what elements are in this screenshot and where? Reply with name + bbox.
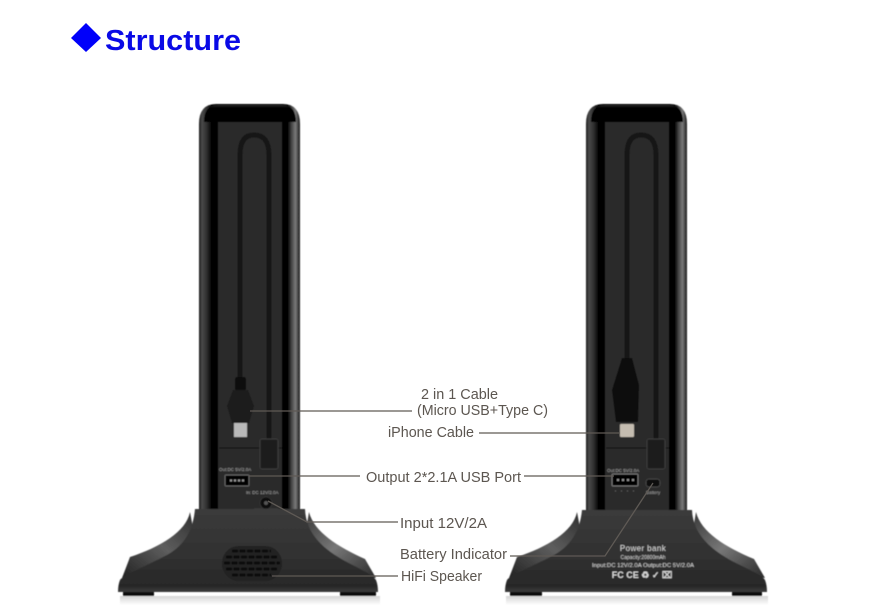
- coiled cable: [240, 135, 269, 440]
- icon: blue diamond: [71, 23, 101, 52]
- 2 in 1 cable connector: [227, 377, 254, 437]
- tower body: [199, 104, 300, 512]
- product: power bank right view: [505, 104, 768, 605]
- USB port: Out:DC 5V/2.0A: [607, 468, 639, 473]
- floor shadow: [120, 596, 380, 605]
- cable holder line: [606, 447, 669, 449]
- callout: Battery Indicator: [400, 483, 653, 563]
- USB port: [607, 468, 639, 491]
- callout: Battery Indicator: Battery Indicator: [400, 546, 507, 563]
- cable plug: [647, 439, 665, 469]
- spec text: [592, 544, 695, 580]
- wing highlights: [509, 512, 587, 578]
- tower body: [586, 104, 687, 512]
- coiled cable: [627, 135, 656, 440]
- DC input port: In: DC 12V/2.0A: [246, 490, 279, 495]
- cable holder line: [219, 447, 282, 449]
- USB port: [219, 467, 251, 486]
- USB port: Out:DC 5V/2.0A: [219, 467, 251, 472]
- spec text: Power bank: [620, 544, 667, 553]
- floor shadow: [506, 596, 768, 605]
- callout: iPhone Cable: iPhone Cable: [388, 424, 474, 441]
- inner panel: [605, 122, 669, 510]
- spec text: FC CE ♻ ✓ ⌧: [612, 570, 672, 580]
- tower cap: [591, 105, 683, 122]
- tower cap: [204, 105, 296, 122]
- title: Structure: [71, 23, 241, 57]
- iPhone cable plug: [260, 439, 278, 469]
- callout: Input 12V/2A: Input 12V/2A: [400, 515, 487, 532]
- base: [118, 509, 378, 592]
- callout: 2 in 1 cable: (Micro USB+Type C): [417, 402, 548, 419]
- callout: Input 12V/2A: [268, 501, 487, 532]
- feet: [123, 592, 376, 596]
- callout: 2 in 1 cable: [250, 386, 548, 419]
- wing highlights: [122, 512, 200, 578]
- battery indicator button: Battery: [646, 490, 661, 495]
- iPhone cable connector: [612, 358, 639, 437]
- inner panel: [218, 122, 282, 510]
- spec text: Capacity:20800mAh: [620, 555, 666, 561]
- product: power bank left view: [118, 104, 380, 605]
- spec text: Input:DC 12V/2.0A Output:DC 5V/2.0A: [592, 563, 695, 569]
- battery indicator button: [646, 479, 661, 495]
- base: [505, 510, 767, 592]
- callout: HiFi Speaker: HiFi Speaker: [401, 568, 482, 585]
- heading text: Structure: [105, 25, 241, 57]
- callout: Output USB port: Output 2*2.1A USB Port: [366, 469, 522, 486]
- feet: [510, 592, 762, 596]
- callout: 2 in 1 cable: 2 in 1 Cable: [421, 386, 498, 403]
- speaker grille: [222, 546, 282, 581]
- DC input port: [246, 490, 279, 520]
